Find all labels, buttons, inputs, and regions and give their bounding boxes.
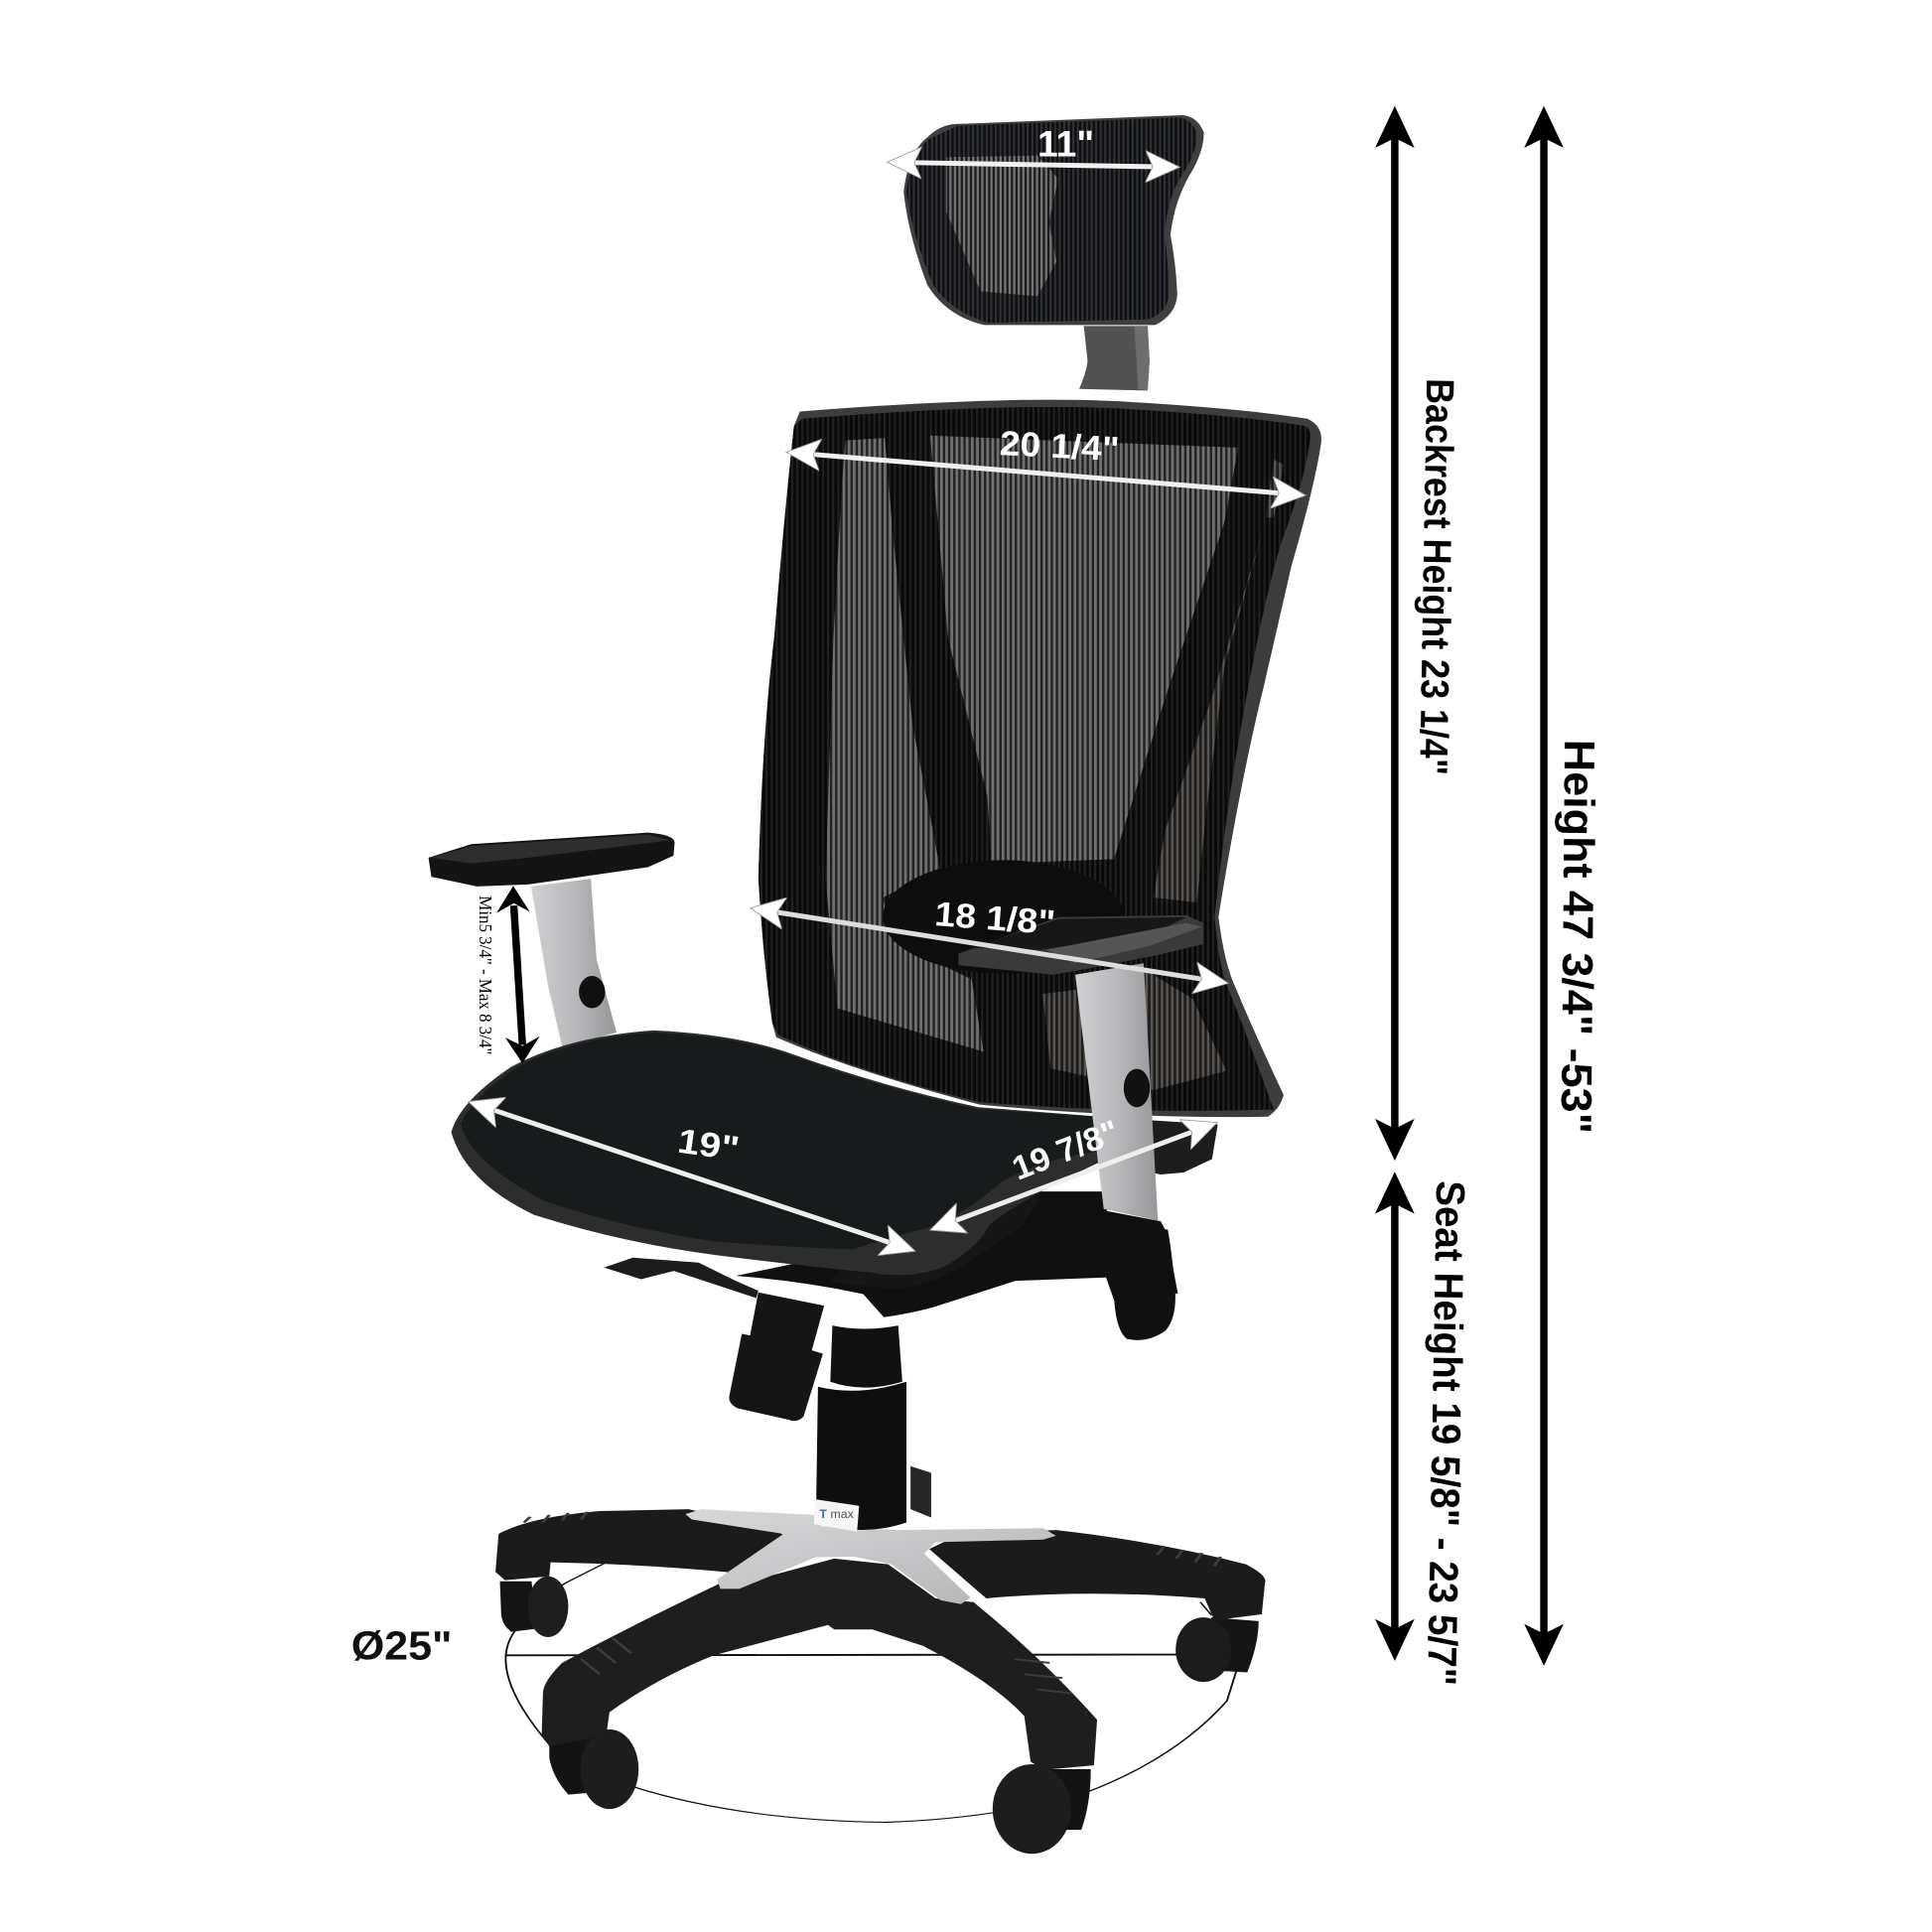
caster: back left xyxy=(500,1577,568,1637)
headrest xyxy=(903,115,1204,325)
piston xyxy=(830,1325,902,1388)
tilt knob xyxy=(729,1293,824,1421)
seat mesh xyxy=(461,1033,1104,1249)
seat lever xyxy=(604,1258,759,1298)
post collar xyxy=(1107,1211,1177,1294)
caster: back right xyxy=(1175,1617,1259,1682)
seat xyxy=(452,1031,1218,1290)
white arrow: backrest lower width xyxy=(777,912,1201,979)
arrow: overall height xyxy=(1524,106,1564,1666)
mesh window: centre xyxy=(930,436,1238,864)
right arm post xyxy=(1075,963,1158,1220)
white arrow: headrest width xyxy=(914,163,1153,167)
backrest xyxy=(759,400,1321,1117)
mesh window: lower right xyxy=(1042,970,1226,1090)
right arm knob xyxy=(1124,1069,1150,1107)
white arrow: seat width xyxy=(955,1132,1192,1221)
mesh window: right strip xyxy=(1154,527,1264,902)
left arm pad xyxy=(429,833,675,887)
backrest outer frame xyxy=(759,400,1321,1117)
black arrow: armrest height xyxy=(496,886,540,1063)
arrow: seat height xyxy=(1375,1172,1415,1661)
leg: back right xyxy=(929,1530,1266,1620)
label: backrest lower width: 18 1/8" xyxy=(933,896,1056,942)
lumbar support pad xyxy=(883,860,1124,974)
armrest height label: Min5 3/4" - Max 8 3/4" xyxy=(476,896,495,1054)
caster: front left xyxy=(549,1729,638,1809)
brand sticker xyxy=(814,1499,859,1532)
rear tab xyxy=(910,1466,931,1517)
leg: back left xyxy=(495,1509,796,1581)
mesh window: left xyxy=(826,438,984,1051)
under-seat mechanism xyxy=(736,1191,1175,1340)
label: seat width: 19 7/8" xyxy=(1008,1114,1124,1187)
headrest window: left xyxy=(946,156,1058,296)
right arm pad xyxy=(958,915,1203,975)
headrest frame xyxy=(903,115,1204,325)
right armrest xyxy=(958,915,1203,1294)
white arrow: seat depth xyxy=(494,1110,890,1243)
mesh window: top right corner xyxy=(1266,460,1284,517)
gas lift cylinder and tension knob xyxy=(604,1191,1175,1532)
label: seat depth: 19" xyxy=(675,1123,742,1169)
label: backrest height: Backrest Height 23 1/4" xyxy=(1411,378,1461,775)
headrest post xyxy=(1079,326,1150,390)
left arm post xyxy=(531,879,617,1047)
label: seat height: Seat Height 19 5/8" - 23 5/7" xyxy=(1419,1180,1473,1686)
caster: front right xyxy=(993,1764,1091,1854)
seat rear extension xyxy=(1098,1117,1218,1174)
leg: front xyxy=(542,1559,1097,1770)
leg grip ridges xyxy=(524,1512,1220,1694)
arrow: backrest height xyxy=(1375,106,1415,1161)
base diameter measure: ellipse and line xyxy=(505,1563,1236,1822)
label: overall height: Height 47 3/4" -53" xyxy=(1552,740,1602,1134)
silver hub star xyxy=(685,1509,1056,1604)
chair base with five legs and casters xyxy=(495,1509,1266,1854)
left armrest xyxy=(429,833,675,1047)
white arrow: backrest top width xyxy=(813,455,1279,493)
seat lower shell xyxy=(830,1193,1041,1290)
left arm knob xyxy=(579,976,606,1008)
backrest dark mesh xyxy=(759,407,1311,1111)
cylinder outer sleeve xyxy=(816,1382,906,1530)
label: headrest width: 11" xyxy=(1037,123,1094,165)
headrest dark mesh xyxy=(906,117,1197,323)
headrest window: right xyxy=(1121,149,1174,291)
brand sticker text: T max xyxy=(819,1507,855,1521)
seat frame xyxy=(452,1031,1104,1275)
label: base diameter: Ø25" xyxy=(351,1623,452,1669)
label: backrest top width: 20 1/4" xyxy=(999,425,1120,469)
